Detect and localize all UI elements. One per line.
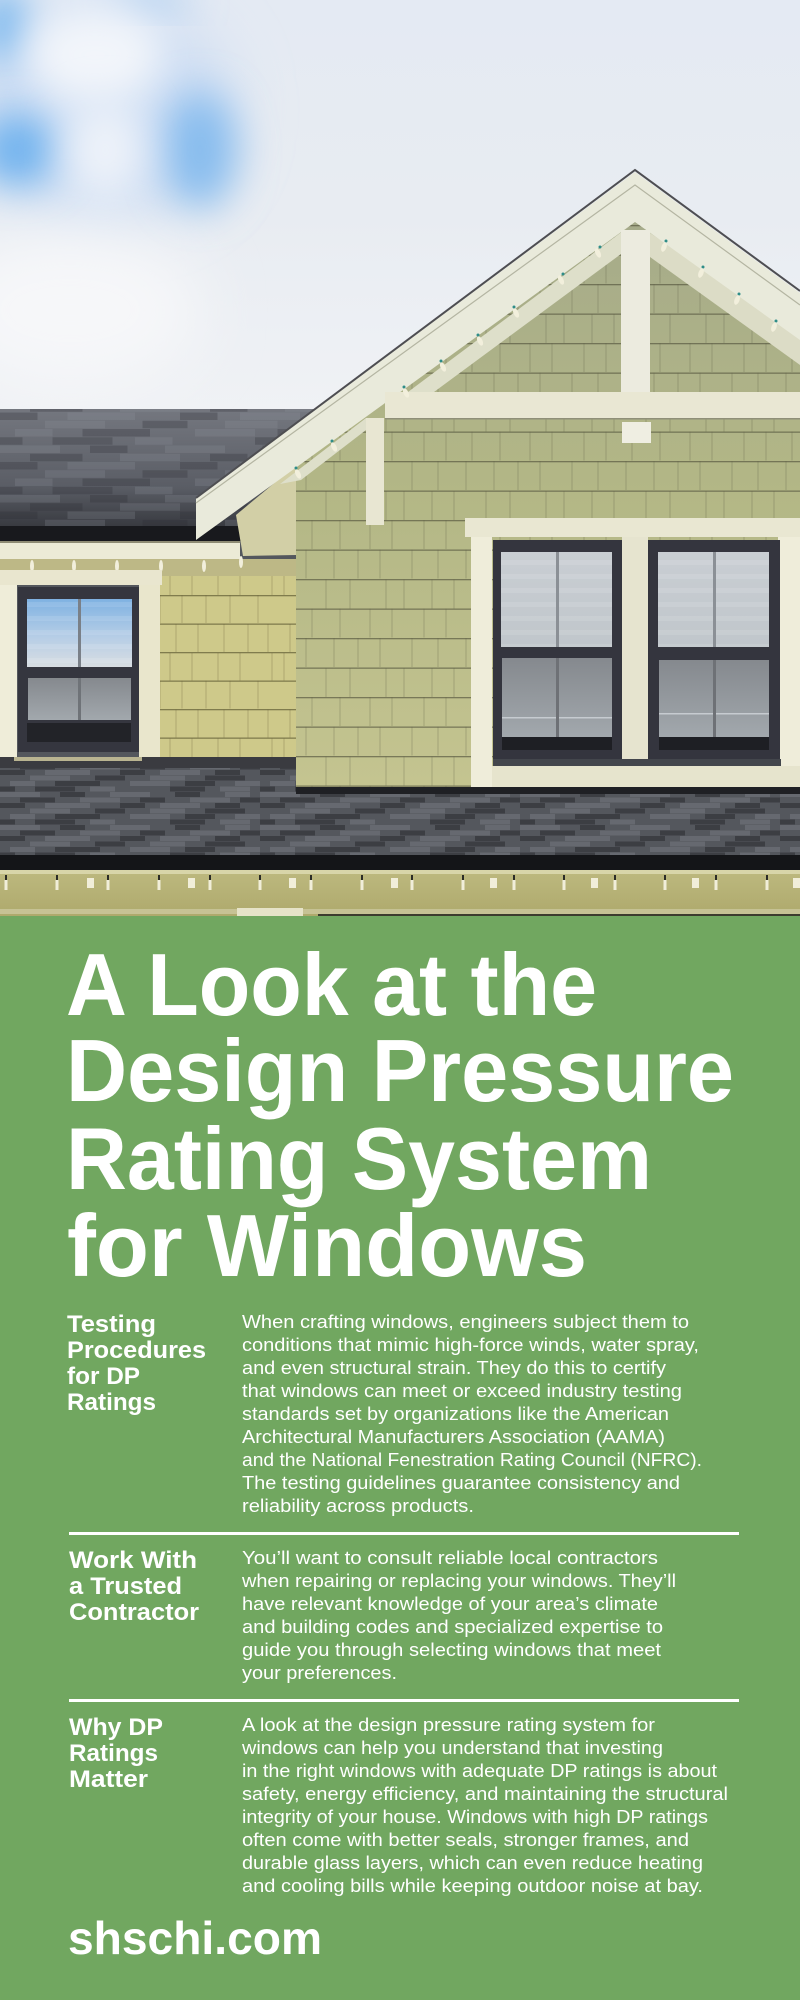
title: Design Pressure bbox=[66, 1021, 734, 1120]
body text: why DP ratings matter: durable glass layers, which can even reduce heating bbox=[242, 1852, 703, 1873]
heading: why DP ratings matter: Matter bbox=[69, 1766, 148, 1793]
title: Rating System bbox=[66, 1109, 652, 1208]
body text: why DP ratings matter: integrity of your house. Windows with high DP ratings bbox=[242, 1806, 708, 1827]
body text: trusted contractor bbox=[241, 1547, 676, 1683]
photo: large double window bbox=[465, 518, 800, 787]
body text: testing procedures: The testing guidelines guarantee consistency and bbox=[242, 1472, 680, 1493]
photo: gable and siding wall bbox=[296, 200, 800, 787]
body text: why DP ratings matter bbox=[241, 1714, 728, 1896]
body text: trusted contractor: your preferences. bbox=[242, 1662, 397, 1683]
heading: testing procedures: Ratings bbox=[67, 1389, 156, 1416]
body text: why DP ratings matter: windows can help you understand that investing bbox=[241, 1737, 663, 1758]
body text: testing procedures bbox=[242, 1311, 702, 1516]
body text: trusted contractor: have relevant knowledge of your area’s climate bbox=[242, 1593, 658, 1614]
body text: testing procedures: and even structural strain. They do this to certify bbox=[242, 1357, 667, 1378]
title bbox=[66, 935, 734, 1295]
footer: website: shschi.com bbox=[68, 1912, 322, 1964]
photo: gable trim boards bbox=[196, 170, 800, 540]
body text: why DP ratings matter: often come with better seals, stronger frames, and bbox=[242, 1829, 689, 1850]
heading: trusted contractor: Contractor bbox=[69, 1599, 199, 1626]
title: A Look at the bbox=[66, 935, 597, 1034]
body text: trusted contractor: You’ll want to consult reliable local contractors bbox=[242, 1547, 658, 1568]
photo: lower shingled roof bbox=[0, 757, 800, 870]
body text: testing procedures: standards set by organizations like the American bbox=[242, 1403, 669, 1424]
body text: trusted contractor: and building codes and specialized expertise to bbox=[242, 1616, 663, 1637]
body text: testing procedures: When crafting windows, engineers subject them to bbox=[242, 1311, 689, 1332]
photo: soffit under gable tip bbox=[236, 465, 296, 556]
body text: testing procedures: reliability across products. bbox=[242, 1495, 474, 1516]
photo: small left window bbox=[0, 570, 162, 761]
photo: upper left shingled roof bbox=[0, 409, 320, 541]
heading: trusted contractor: a Trusted bbox=[69, 1573, 182, 1600]
body text: why DP ratings matter: safety, energy efficiency, and maintaining the structural bbox=[242, 1783, 728, 1804]
body text: testing procedures: conditions that mimic high-force winds, water spray, bbox=[242, 1334, 699, 1355]
heading: testing procedures: Procedures bbox=[67, 1337, 206, 1364]
body text: testing procedures: Architectural Manufacturers Association (AAMA) bbox=[242, 1426, 665, 1447]
photo: gable string lights bbox=[30, 240, 778, 572]
body text: why DP ratings matter: A look at the design pressure rating system for bbox=[242, 1714, 655, 1735]
heading: testing procedures: Testing bbox=[67, 1311, 156, 1338]
hero photo: house gable with windows bbox=[0, 0, 800, 916]
heading: testing procedures: for DP bbox=[67, 1363, 140, 1390]
section: why DP ratings matter bbox=[69, 1714, 728, 1896]
body text: testing procedures: that windows can meet or exceed industry testing bbox=[242, 1380, 682, 1401]
body text: trusted contractor: guide you through selecting windows that meet bbox=[242, 1639, 661, 1660]
heading: why DP ratings matter: Ratings bbox=[69, 1740, 158, 1767]
heading: why DP ratings matter: Why DP bbox=[69, 1714, 163, 1741]
photo: left fascia and soffit bbox=[0, 541, 296, 760]
heading: trusted contractor bbox=[69, 1547, 199, 1626]
section: trusted contractor bbox=[69, 1547, 676, 1683]
heading: testing procedures bbox=[67, 1311, 206, 1416]
section: testing procedures bbox=[67, 1311, 702, 1516]
photo: olive eave band with lights bbox=[0, 870, 800, 916]
body text: why DP ratings matter: in the right windows with adequate DP ratings is about bbox=[242, 1760, 717, 1781]
heading: why DP ratings matter bbox=[69, 1714, 163, 1793]
body text: why DP ratings matter: and cooling bills while keeping outdoor noise at bay. bbox=[242, 1875, 703, 1896]
body text: testing procedures: and the National Fenestration Rating Council (NFRC). bbox=[242, 1449, 702, 1470]
heading: trusted contractor: Work With bbox=[69, 1547, 197, 1574]
title: for Windows bbox=[67, 1196, 587, 1295]
photo: cloudy sky bbox=[0, 0, 800, 420]
body text: trusted contractor: when repairing or replacing your windows. They’ll bbox=[241, 1570, 676, 1591]
